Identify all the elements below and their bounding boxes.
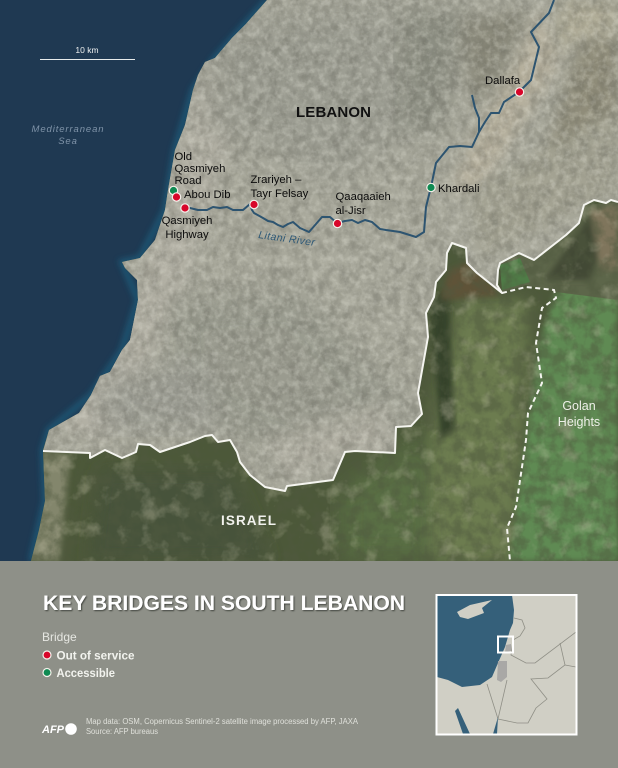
source text: Map data: OSM, Copernicus Sentinel-2 satellite image processed by AFP, JAXA — [86, 717, 359, 726]
scale bar: 10 km — [75, 45, 99, 55]
Litani River — [185, 0, 554, 237]
marker: Qasmiyeh Highway out of service — [181, 204, 189, 212]
label: Golan Heights: Heights — [558, 415, 600, 429]
source text: Source: AFP bureaus — [86, 727, 158, 736]
inset highlight square — [498, 636, 513, 652]
label: Qaaqaaieh al-Jisr: Qaaqaaieh — [336, 191, 391, 203]
label: Khardali: Khardali — [438, 183, 479, 195]
Golan Heights green — [510, 270, 618, 561]
label: Zrariyeh – Tayr Felsay: Zrariyeh – — [250, 174, 302, 186]
label: Mediterranean Sea: Sea — [58, 136, 78, 147]
border: Golan Heights dashed line — [502, 287, 556, 561]
land light patches — [33, 202, 618, 561]
AFP logo — [41, 723, 77, 736]
inset south Lebanon — [505, 644, 511, 652]
label: Old Qasmiyeh Road: Road — [174, 175, 202, 187]
land dark texture — [32, 204, 618, 561]
inset West Bank — [497, 661, 507, 682]
coastal plain of Israel — [31, 452, 72, 561]
legend: accessible: Accessible — [56, 666, 115, 680]
Litani valley east ridge — [460, 26, 554, 185]
Hermon foothills — [500, 202, 618, 300]
marker: Old Qasmiyeh Road accessible — [169, 186, 178, 195]
scale bar — [40, 45, 135, 60]
label: Zrariyeh – Tayr Felsay: Tayr Felsay — [250, 188, 309, 200]
land base — [0, 0, 618, 561]
Lebanon desaturated area — [43, 0, 618, 490]
legend — [42, 630, 135, 680]
label: Golan Heights: Golan — [562, 399, 596, 413]
inset land — [437, 595, 576, 734]
AFP logo: AFP — [41, 724, 65, 736]
river tributary — [472, 95, 479, 132]
label: Mediterranean Sea: Mediterranean — [32, 124, 104, 135]
marker: Abou Dib out of service — [172, 193, 181, 201]
marker: Khardali accessible — [427, 183, 435, 192]
inset Red Sea gulfs — [455, 708, 470, 734]
Galilee patches — [90, 470, 270, 561]
marker: Dallafa out of service — [515, 88, 524, 96]
label: Old Qasmiyeh Road: Qasmiyeh — [174, 163, 225, 175]
bridge labels — [162, 75, 521, 241]
label: Qasmiyeh Highway: Highway — [165, 229, 209, 241]
label: Old Qasmiyeh Road: Old — [174, 151, 192, 163]
label: Dallafa: Dallafa — [485, 75, 521, 87]
label: ISRAEL: ISRAEL — [221, 513, 276, 528]
inset frame — [436, 595, 576, 734]
label: Abou Dib: Abou Dib — [184, 189, 230, 201]
inset Cyprus — [457, 600, 492, 619]
footer panel — [0, 561, 618, 768]
texture — [44, 0, 618, 487]
label: Qasmiyeh Highway: Qasmiyeh — [162, 215, 212, 227]
sea — [0, 0, 618, 561]
central ridges — [203, 12, 393, 165]
coastal shallows — [31, 0, 267, 561]
inset locator map — [436, 595, 576, 734]
coast highlight — [60, 16, 252, 428]
label: LEBANON: LEBANON — [296, 104, 371, 121]
label: Qaaqaaieh al-Jisr: al-Jisr — [336, 205, 366, 217]
title: KEY BRIDGES IN SOUTH LEBANON — [43, 591, 405, 615]
marker: Qaaqaaieh out of service — [333, 219, 342, 228]
map: satellite base — [0, 0, 618, 561]
legend heading: Bridge — [42, 630, 77, 644]
label: Litani River: Litani River — [258, 229, 316, 249]
legend: out of service: Out of service — [56, 648, 135, 662]
bridge markers — [169, 88, 524, 228]
marker: Zrariyeh out of service — [250, 200, 258, 209]
border: Lebanon white line — [43, 200, 618, 491]
inset borders — [487, 618, 576, 723]
Hula valley — [430, 300, 530, 561]
southern hills — [166, 294, 398, 442]
inset sea — [437, 595, 514, 687]
